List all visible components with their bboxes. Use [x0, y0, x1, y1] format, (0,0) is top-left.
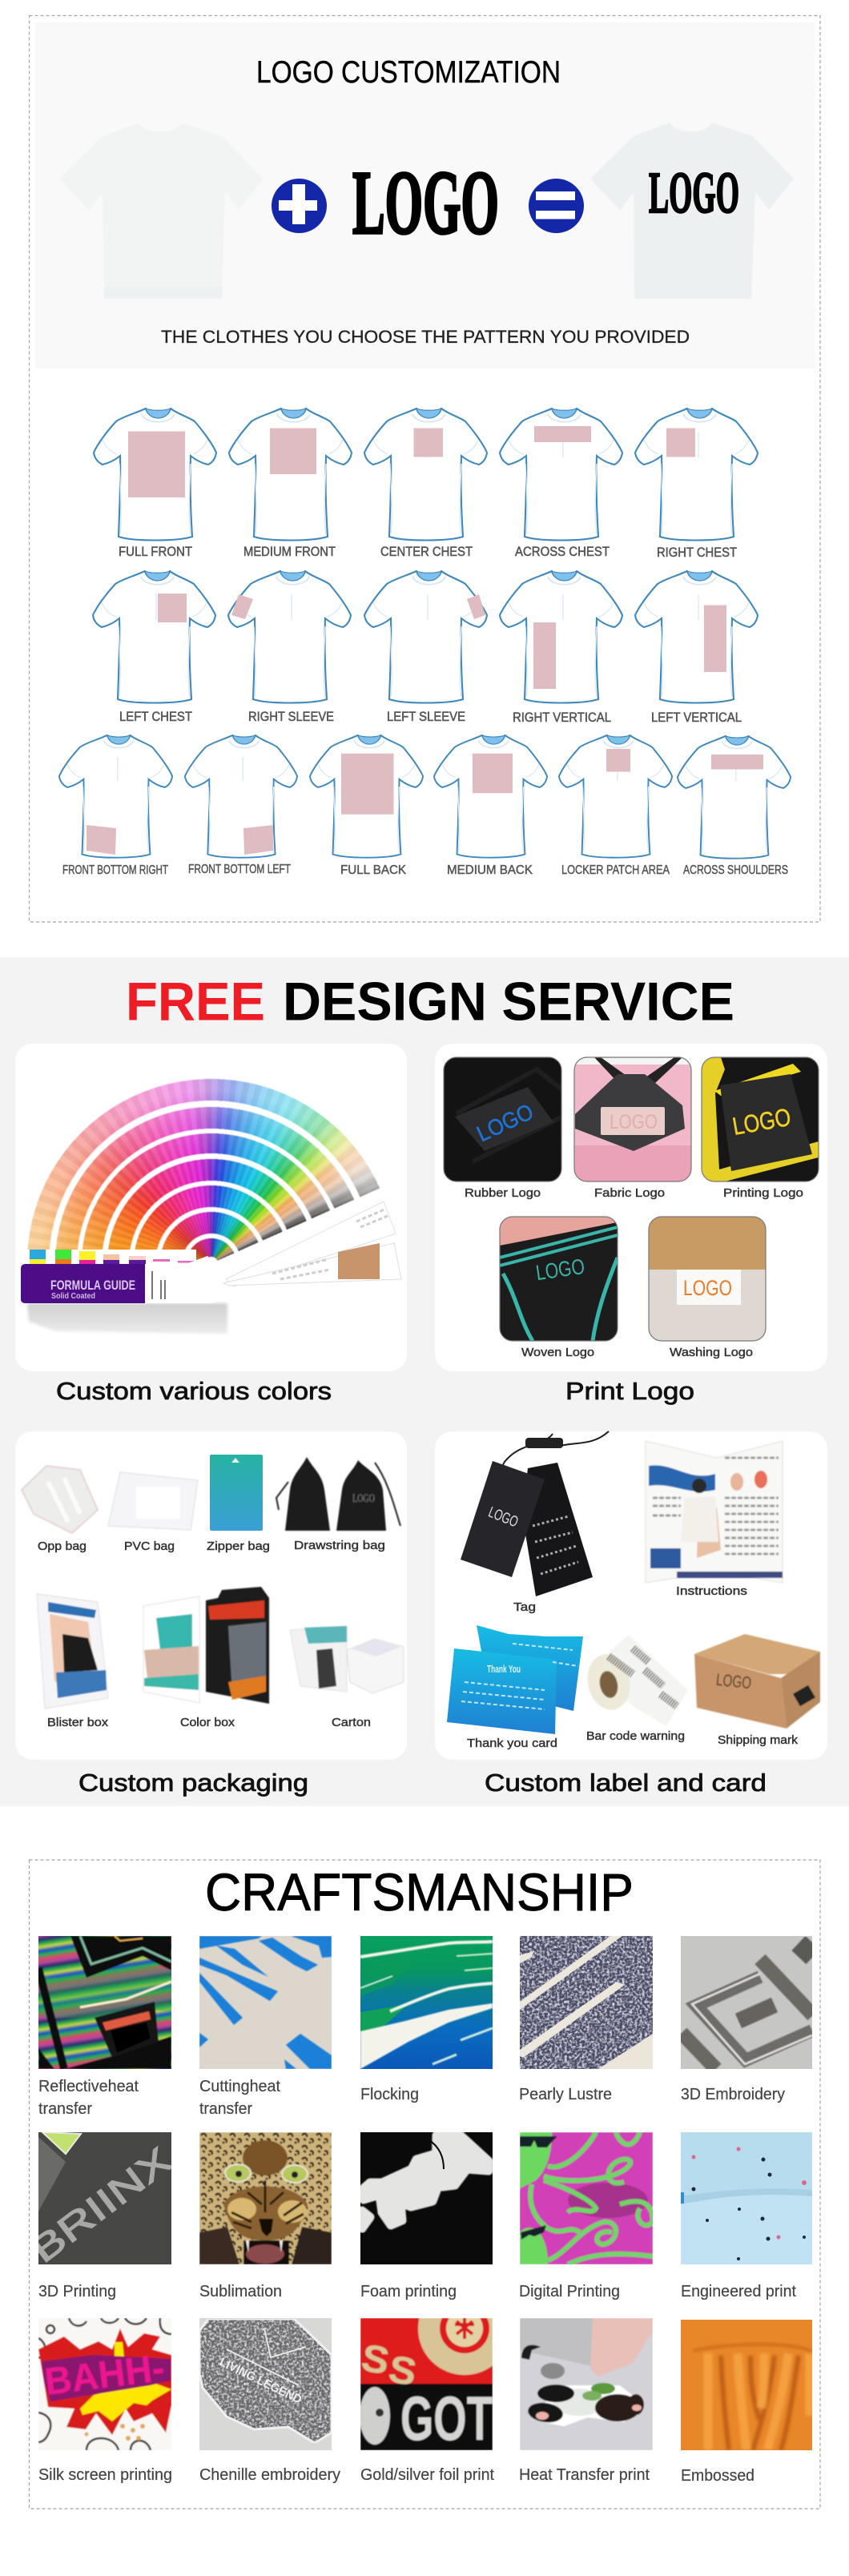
item: drawstring bags [276, 1457, 400, 1531]
logo tile: fabric [574, 1057, 691, 1181]
color strips at fan base [24, 1250, 196, 1265]
logo tile: washing: LOGO [683, 1276, 732, 1300]
item: barcode roll [582, 1635, 688, 1726]
craft: gold and silver foil print [360, 2318, 494, 2483]
craft: digital printing: Digital Printing [519, 2283, 620, 2300]
item: shipping box: LOGO [715, 1671, 752, 1693]
section: craftsmanship [23, 1860, 820, 2509]
craft: embossed: Embossed [681, 2467, 754, 2485]
item: carton with lid [290, 1626, 404, 1693]
craft: 3d embroidery [681, 1936, 813, 2103]
craft: 3d printing: 3D Printing [38, 2283, 116, 2300]
dashed frame [29, 1860, 820, 2509]
craft: sublimation [199, 2132, 332, 2300]
section: logo customization [29, 16, 820, 922]
craft: heat transfer print [519, 2318, 653, 2484]
placement: front bottom right [59, 735, 172, 877]
packaging labels: bags: Opp bag [38, 1540, 87, 1553]
craft: gold and silver foil print: S [358, 2337, 392, 2383]
panel background: pale grey [35, 22, 815, 368]
logo tile: rubber [444, 1057, 561, 1181]
craft: pearly lustre: Pearly Lustre [519, 2086, 612, 2103]
placement: right vertical: RIGHT VERTICAL [513, 710, 611, 725]
craft: reflective heat transfer [37, 1934, 173, 2118]
craft: engineered print [681, 2132, 812, 2300]
panel: custom label and card [435, 1431, 827, 1760]
section background [0, 957, 849, 1806]
placement: locker patch area: LOCKER PATCH AREA [561, 863, 670, 877]
swatch cover shadow [27, 1303, 227, 1334]
craft: flocking: Flocking [360, 2086, 419, 2103]
craft: foam printing: Foam printing [360, 2283, 457, 2300]
placement: medium front: MEDIUM FRONT [243, 544, 336, 559]
craft: silk screen printing: BAHH- [42, 2347, 167, 2404]
craft: cutting heat transfer: transfer [199, 2100, 252, 2118]
placement: medium back [434, 735, 547, 877]
dashed frame [29, 16, 820, 922]
placement: front bottom right: FRONT BOTTOM RIGHT [62, 863, 168, 877]
placement: right sleeve: RIGHT SLEEVE [248, 709, 334, 724]
craft: gold and silver foil print: Gold/silver foil print [360, 2466, 494, 2484]
placement: right sleeve [228, 571, 351, 724]
placement: across chest: ACROSS CHEST [515, 544, 610, 559]
placement: full front [94, 409, 216, 559]
craft: 3d printing [23, 2132, 179, 2300]
icon: t-shirt with logo [590, 123, 794, 299]
label: shipping mark: Shipping mark [718, 1733, 799, 1747]
craft: silk screen printing [38, 2318, 172, 2484]
craft: 3d printing: BRIINX [23, 2139, 179, 2271]
packaging labels: bags: Zipper bag [207, 1540, 270, 1553]
placement: across chest [500, 409, 622, 559]
packaging labels: bags [38, 1539, 385, 1553]
craft: engineered print: Engineered print [681, 2283, 796, 2300]
title: CRAFTSMANSHIP [205, 1862, 634, 1922]
craft: chenille embroidery: Chenille embroidery [199, 2466, 340, 2484]
craft: cutting heat transfer: Cuttingheat [199, 2078, 280, 2095]
placement: across shoulders [678, 736, 791, 877]
craft: heat transfer print: Heat Transfer print [519, 2466, 650, 2484]
placement: left sleeve: LEFT SLEEVE [387, 709, 465, 724]
title: LOGO CUSTOMIZATION [256, 55, 561, 90]
craft: silk screen printing: Silk screen printing [38, 2466, 172, 2484]
craft: reflective heat transfer: Reflectiveheat [38, 2078, 139, 2095]
craft: gold and silver foil print: S [385, 2348, 420, 2394]
placement: locker patch area [559, 735, 672, 877]
logo tile: woven [500, 1217, 618, 1341]
logo label: rubber: Rubber Logo [465, 1186, 541, 1200]
packaging labels: bags: PVC bag [124, 1540, 175, 1553]
caption: THE CLOTHES YOU CHOOSE THE PATTERN YOU PROVIDED [161, 327, 690, 347]
placement: left vertical: LEFT VERTICAL [651, 710, 742, 725]
item: shipping box [694, 1634, 820, 1729]
logo tile: rubber: LOGO [473, 1099, 537, 1146]
icon: blank t-shirt [59, 123, 264, 299]
placement: center chest [364, 409, 487, 559]
panel: custom colors [15, 1044, 407, 1371]
placement: front bottom left [185, 735, 297, 876]
placement: left chest: LEFT CHEST [119, 709, 192, 724]
label: tag: Tag [513, 1600, 536, 1614]
item: zipper bag [210, 1455, 263, 1531]
logo label: printing: Printing Logo [723, 1186, 803, 1200]
swatch cover [21, 1256, 226, 1303]
placement: right vertical [500, 571, 622, 725]
icon: plus [272, 179, 327, 233]
placement: medium back: MEDIUM BACK [447, 863, 533, 877]
placement: full front: FULL FRONT [119, 544, 192, 559]
craft: chenille embroidery: LIVING LEGEND [217, 2355, 304, 2407]
craft: cutting heat transfer [199, 1936, 332, 2118]
section: free design service [0, 957, 849, 1806]
logo tile: printing: LOGO [730, 1103, 793, 1141]
item: blister box [37, 1594, 108, 1709]
craft: foam printing [360, 2132, 493, 2300]
placement: full back [310, 735, 423, 877]
logo label: woven: Woven Logo [521, 1346, 594, 1359]
placement: full back: FULL BACK [340, 863, 406, 877]
label: instructions: Instructions [676, 1584, 747, 1598]
title: FREE [126, 971, 265, 1032]
packaging labels: boxes: Carton [332, 1716, 371, 1729]
swatch fan [15, 1065, 407, 1266]
craft: flocking [360, 1936, 493, 2103]
placement: front bottom left: FRONT BOTTOM LEFT [188, 863, 291, 876]
icon: t-shirt with logo: LOGO [649, 160, 739, 225]
item: pvc bag [108, 1472, 198, 1530]
item: opp bag [22, 1466, 98, 1533]
label: thank you card: Thank you card [467, 1737, 557, 1750]
item: hang tags [461, 1431, 609, 1596]
logo tile: woven: LOGO [534, 1254, 586, 1285]
logo tile: printing [702, 1057, 819, 1181]
icon: equals [529, 179, 584, 233]
item: color boxes [143, 1587, 269, 1704]
caption: custom various colors: Custom various colors [56, 1377, 332, 1405]
panel: custom packaging [15, 1431, 407, 1760]
big logo word: LOGO [352, 153, 499, 253]
logo label: washing: Washing Logo [670, 1346, 753, 1359]
placement: across shoulders: ACROSS SHOULDERS [683, 863, 788, 877]
placement: left sleeve [364, 571, 487, 724]
craft: digital printing [519, 2132, 653, 2300]
logo tile: washing [649, 1217, 766, 1341]
craft: chenille embroidery [199, 2318, 340, 2484]
craft: pearly lustre [519, 1936, 653, 2103]
placement: left chest [93, 571, 215, 724]
craft: sublimation: Sublimation [199, 2283, 282, 2300]
swatch cover: FORMULA GUIDE [50, 1278, 135, 1293]
caption: custom label and card: Custom label and card [485, 1769, 767, 1797]
swatch cover: Solid Coated [51, 1291, 95, 1301]
craft: reflective heat transfer: transfer [38, 2100, 92, 2118]
item: thank you cards: Thank You [487, 1663, 521, 1675]
logo label: fabric: Fabric Logo [594, 1186, 665, 1200]
back cards of swatch book [223, 1201, 401, 1286]
logo tile: fabric: LOGO [610, 1111, 658, 1133]
packaging labels: boxes: Color box [180, 1716, 235, 1729]
item: instruction leaflet [646, 1441, 783, 1583]
placement: left vertical [635, 571, 758, 725]
title: DESIGN SERVICE [283, 971, 734, 1032]
caption: print logo: Print Logo [565, 1377, 694, 1405]
placement: medium front [229, 409, 352, 559]
item: hang tags: LOGO [486, 1504, 521, 1531]
panel: print logo [435, 1044, 827, 1371]
packaging labels: boxes: Blister box [47, 1716, 109, 1729]
item: thank you cards [447, 1625, 583, 1734]
placement: right chest: RIGHT CHEST [657, 545, 737, 560]
craft: 3d embroidery: 3D Embroidery [681, 2086, 785, 2103]
packaging labels: boxes [47, 1716, 371, 1729]
placement: right chest [635, 409, 758, 560]
packaging labels: bags: Drawstring bag [294, 1539, 385, 1552]
item: drawstring bags: LOGO [352, 1492, 375, 1505]
caption: custom packaging: Custom packaging [78, 1769, 308, 1797]
label: bar code warning: Bar code warning [586, 1729, 685, 1743]
craft: embossed [681, 2320, 812, 2485]
placement: center chest: CENTER CHEST [380, 544, 473, 559]
